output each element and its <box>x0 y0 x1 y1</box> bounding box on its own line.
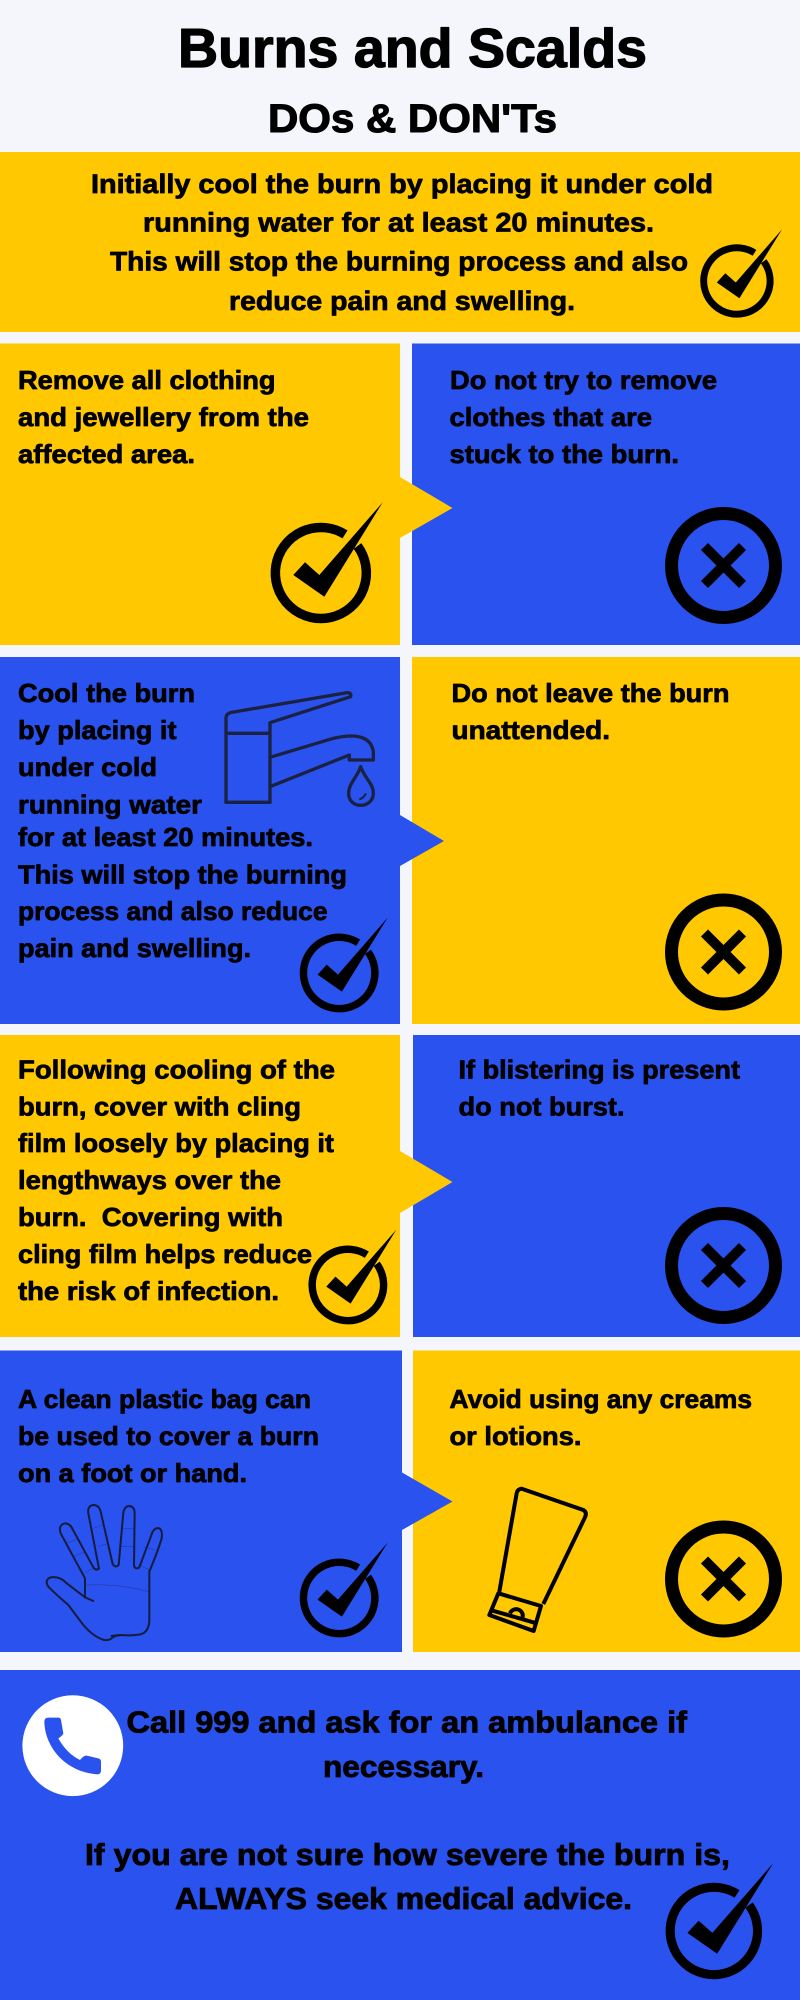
text: cover with cling film: Following cooling of the <box>18 1054 335 1084</box>
text: cool the burn: Cool the burn <box>18 678 195 708</box>
icon: tick in circle <box>312 1230 396 1321</box>
text: do not leave unattended: unattended. <box>452 715 610 745</box>
text: cool the burn: under cold <box>18 752 157 782</box>
title: Burns and Scalds <box>178 17 647 79</box>
text: cover with cling film: film loosely by placing it <box>18 1128 334 1158</box>
text: do not burst blisters <box>458 1054 740 1122</box>
subtitle: DOs & DON'Ts <box>268 97 557 141</box>
text: plastic bag: on a foot or hand. <box>18 1458 247 1488</box>
text: initial cooling advice: running water for at least 20 minutes. <box>143 208 654 238</box>
text: remove clothing: affected area. <box>18 439 195 469</box>
text: initial cooling advice <box>91 169 713 316</box>
panel: do not leave unattended (don't) <box>412 657 800 1024</box>
text: cover with cling film: lengthways over the <box>18 1165 281 1195</box>
text: remove clothing: Remove all clothing <box>18 365 276 395</box>
text: cool the burn: by placing it <box>18 715 177 745</box>
text: seek medical advice: If you are not sure how severe the burn is, <box>85 1837 730 1872</box>
icon: white phone badge <box>22 1695 123 1796</box>
text: do not remove stuck clothes: stuck to the burn. <box>450 439 679 469</box>
panel: remove clothing (do) <box>0 344 400 645</box>
icon: cross in circle <box>672 1527 776 1631</box>
arrow: row 1 <box>400 477 452 538</box>
text: do not leave unattended: Do not leave the burn <box>452 678 730 708</box>
icon: tick in circle <box>275 502 383 618</box>
panel: cool the burn (do) <box>0 657 400 1024</box>
text: initial cooling advice: Initially cool the burn by placing it under cold <box>91 169 713 199</box>
icon: tick in circle <box>303 918 388 1009</box>
text: seek medical advice <box>85 1837 730 1916</box>
text: cover with cling film: cling film helps reduce <box>18 1239 312 1269</box>
text: cover with cling film: burn, cover with cling <box>18 1092 301 1122</box>
text: plastic bag: be used to cover a burn <box>18 1421 319 1451</box>
text: initial cooling advice: This will stop the burning process and also <box>110 246 688 276</box>
text: do not remove stuck clothes: Do not try to remove <box>450 365 717 395</box>
text: seek medical advice: ALWAYS seek medical advice. <box>175 1881 632 1916</box>
panel: do not remove stuck clothes (don't) <box>412 344 800 645</box>
text: cool the burn <box>18 678 347 963</box>
text: avoid creams: Avoid using any creams <box>450 1384 752 1414</box>
text: cool the burn: This will stop the burning <box>18 860 347 890</box>
panel: call 999 <box>0 1670 800 2000</box>
icon: dripping tap <box>226 693 373 805</box>
panel: cover with cling film (do) <box>0 1035 400 1337</box>
text: call 999 <box>126 1704 688 1784</box>
icon: cross in circle <box>672 514 776 618</box>
text: do not remove stuck clothes: clothes that are <box>450 402 652 432</box>
text: do not burst blisters: do not burst. <box>458 1092 624 1122</box>
panel: plastic bag (do) <box>0 1350 402 1652</box>
text: cool the burn: running water <box>18 790 202 820</box>
icon: cross in circle <box>672 1214 776 1318</box>
panel: initial cooling advice <box>0 152 800 332</box>
arrow: row 3 <box>400 1151 452 1213</box>
text: remove clothing: and jewellery from the <box>18 402 309 432</box>
text: do not remove stuck clothes <box>450 365 717 469</box>
arrow: row 2 <box>400 815 444 866</box>
panel: avoid creams (don't) <box>413 1350 800 1652</box>
text: avoid creams: or lotions. <box>450 1421 582 1451</box>
text: cool the burn: process and also reduce <box>18 896 328 926</box>
text: cover with cling film: the risk of infection. <box>18 1276 279 1306</box>
arrow: row 4 <box>402 1472 452 1530</box>
text: cover with cling film <box>18 1054 335 1306</box>
text: do not leave unattended <box>452 678 730 745</box>
text: remove clothing <box>18 365 309 469</box>
text: do not burst blisters: If blistering is present <box>458 1054 740 1084</box>
text: plastic bag: A clean plastic bag can <box>18 1384 311 1414</box>
icon: tick in circle <box>704 229 782 314</box>
text: plastic bag <box>18 1384 319 1488</box>
text: call 999: necessary. <box>323 1749 484 1784</box>
icon: cream tube <box>489 1489 586 1631</box>
text: call 999: Call 999 and ask for an ambulance if <box>126 1704 688 1740</box>
text: initial cooling advice: reduce pain and swelling. <box>229 286 575 316</box>
text: cool the burn: pain and swelling. <box>18 933 251 963</box>
icon: tick in circle <box>670 1863 773 1975</box>
icon: tick in circle <box>303 1543 388 1634</box>
panel: do not burst blisters (don't) <box>413 1035 800 1337</box>
text: avoid creams <box>450 1384 752 1451</box>
icon: hand outline <box>47 1505 162 1640</box>
text: cool the burn: for at least 20 minutes. <box>18 822 313 852</box>
text: cover with cling film: burn. Covering with <box>18 1202 283 1232</box>
icon: cross in circle <box>672 900 776 1004</box>
